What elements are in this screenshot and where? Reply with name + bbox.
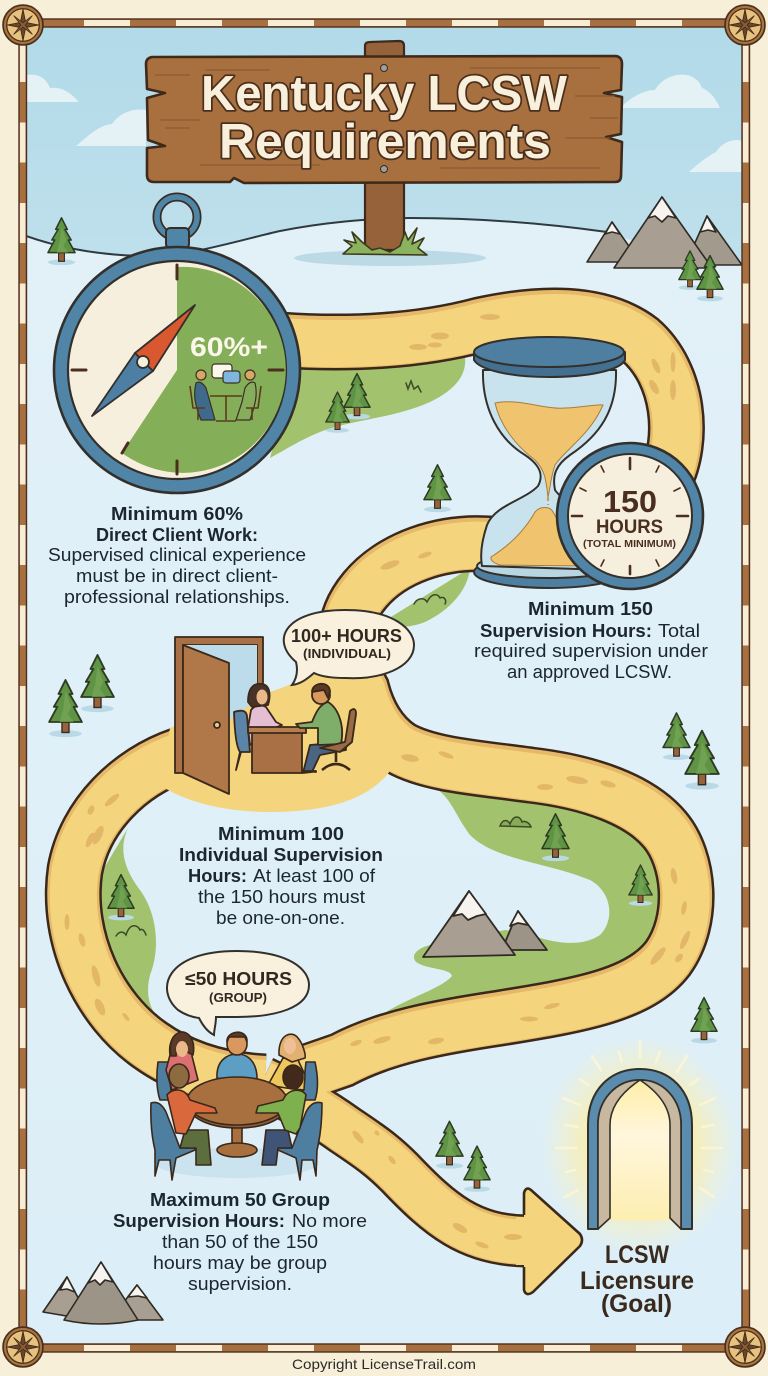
floor shadow <box>155 1148 319 1178</box>
man's torso <box>296 702 342 745</box>
bubble shape <box>284 610 414 685</box>
ticks <box>72 265 283 474</box>
back-right woman body <box>268 1058 305 1090</box>
bottom plate <box>474 556 624 588</box>
road plaza around office <box>160 640 390 812</box>
green 60 percent sector <box>122 267 286 473</box>
text block: 150 hours: Total <box>658 621 700 641</box>
front-left legs <box>180 1130 211 1165</box>
office scene: individual supervision <box>175 637 356 794</box>
door <box>183 645 229 794</box>
text block: 100 individual: be one-on-one. <box>216 908 345 928</box>
clock face <box>568 454 692 578</box>
desk top <box>248 727 306 733</box>
winding road <box>73 316 686 1242</box>
title: Requirements <box>219 115 551 169</box>
text block: 100 individual: Minimum 100 <box>218 824 344 844</box>
meeting icon <box>190 364 261 421</box>
back-right woman's face <box>284 1038 296 1054</box>
HOURS: HOURS <box>596 517 663 538</box>
front-right head <box>283 1065 303 1089</box>
text block: 50 group: No more <box>292 1211 367 1231</box>
text block: 60 percent: Supervised clinical experience <box>48 545 306 565</box>
rays <box>556 1041 722 1197</box>
crown stem <box>166 228 189 248</box>
table pedestal <box>232 1125 242 1147</box>
man's chair <box>320 709 356 752</box>
title <box>201 67 568 169</box>
road patch over arrowhead joint <box>516 1217 530 1265</box>
title: Kentucky LCSW <box>201 67 568 121</box>
text block: 60 percent: Direct Client Work: <box>96 525 258 545</box>
clouds <box>27 75 742 172</box>
dial face <box>68 261 286 479</box>
nails <box>380 64 388 172</box>
compass needle <box>92 305 195 416</box>
falling sand <box>547 497 549 505</box>
top sand <box>495 402 603 497</box>
top plate edge <box>474 352 625 377</box>
center mountains <box>423 891 547 957</box>
table edge <box>188 1104 287 1128</box>
arch outer <box>588 1069 692 1229</box>
grass tuft <box>343 228 427 255</box>
top plate <box>474 337 624 367</box>
text block: 60 percent: professional relationships. <box>64 587 290 607</box>
bubble text 1: ≤50 HOURS <box>185 969 292 989</box>
table top <box>187 1077 287 1125</box>
clock case <box>557 443 703 589</box>
bubble shape <box>167 951 309 1035</box>
text block: 100 individual: Individual Supervision <box>179 845 383 865</box>
bubble text 2: (GROUP) <box>209 990 267 1005</box>
stopwatch: 60% direct client work <box>54 197 300 493</box>
goal label: (Goal) <box>601 1290 672 1318</box>
glow <box>540 1035 740 1255</box>
back-left woman's face <box>176 1041 188 1057</box>
text block: 100 individual: Hours: <box>188 866 247 886</box>
text block: 100 individual: the 150 hours must <box>198 887 365 907</box>
woman <box>248 705 282 745</box>
text block: 50 group: supervision. <box>188 1274 292 1294</box>
crown ring colour <box>157 197 197 237</box>
bottom sand <box>491 508 585 566</box>
text block: 60 percent <box>48 504 306 607</box>
text block: 60 percent: must be in direct client- <box>76 566 278 586</box>
center man head <box>227 1033 247 1055</box>
bubble text 2: (INDIVIDUAL) <box>303 646 391 661</box>
text block: 150 hours <box>474 599 708 682</box>
table base <box>217 1143 257 1157</box>
man's legs <box>303 742 346 773</box>
goal portal <box>540 1035 740 1255</box>
goal label: Licensure <box>580 1267 694 1295</box>
center man body <box>217 1054 257 1082</box>
bubble text 1: 100+ HOURS <box>291 626 402 646</box>
man's shoe <box>303 771 316 772</box>
arrowhead to goal <box>524 1189 582 1294</box>
text block: 150 hours: Minimum 150 <box>528 599 653 619</box>
text block: 50 group: Supervision Hours: <box>113 1211 285 1231</box>
front-left torso <box>167 1090 217 1134</box>
woman's face <box>256 690 268 704</box>
doorway <box>183 645 257 720</box>
grass details <box>116 381 531 936</box>
signpost <box>146 41 622 266</box>
man's hair <box>312 684 330 698</box>
woman's chair <box>234 711 250 770</box>
minor ticks <box>580 466 680 566</box>
arch light <box>609 1080 670 1220</box>
goal label <box>580 1241 694 1318</box>
text block: 60 percent: Minimum 60% <box>111 504 243 524</box>
speech bubble: 50 hours <box>167 951 309 1035</box>
crown ring <box>157 197 197 237</box>
back-right woman's hair <box>279 1034 305 1062</box>
back-left woman <box>166 1032 198 1090</box>
hours clock badge <box>557 443 703 589</box>
text block: 50 group: hours may be group <box>153 1253 327 1273</box>
road markings <box>64 314 692 1250</box>
text block: 150 hours: required supervision under <box>474 641 708 661</box>
woman's head <box>248 684 270 707</box>
150: 150 <box>603 484 657 519</box>
bottom-left mountains <box>43 1262 163 1324</box>
back-left woman's hair <box>170 1032 194 1056</box>
text block: 100 individual <box>179 824 383 928</box>
speech bubble: 100+ hours <box>284 610 414 685</box>
arch inner stone <box>598 1080 681 1229</box>
desk <box>252 731 302 773</box>
front-right chair <box>278 1102 322 1180</box>
text block: 50 group: Maximum 50 Group <box>150 1190 330 1210</box>
wooden plank <box>146 56 622 183</box>
group table scene <box>151 1032 322 1180</box>
front-right torso <box>256 1090 306 1134</box>
wood grain <box>155 68 618 168</box>
copyright: Copyright LicenseTrail.com <box>292 1356 476 1372</box>
center man hair <box>227 1032 247 1042</box>
post <box>365 41 404 250</box>
door knob <box>214 722 220 728</box>
man's head <box>312 686 330 704</box>
glass body <box>481 370 616 570</box>
outer case <box>54 247 300 493</box>
chair base <box>322 752 350 770</box>
hourglass <box>474 337 625 588</box>
text block: 150 hours: an approved LCSW. <box>507 662 672 682</box>
text block: 50 group: than 50 of the 150 <box>162 1232 318 1252</box>
trees <box>48 218 723 1192</box>
front-right legs <box>262 1130 292 1165</box>
front-left head <box>169 1064 189 1088</box>
front-left chair <box>151 1102 195 1180</box>
text block: 150 hours: Supervision Hours: <box>480 621 652 641</box>
text block: 100 individual: At least 100 of <box>253 866 376 886</box>
door frame <box>175 637 263 773</box>
mountains: top right <box>587 197 742 268</box>
60 percent label: 60%+ <box>190 332 268 362</box>
clock ticks <box>572 458 688 574</box>
total minimum: (TOTAL MINIMUM) <box>583 538 676 550</box>
signpost shadow <box>294 250 486 266</box>
text block: 50 group <box>113 1190 367 1294</box>
bottom plate top <box>477 554 621 578</box>
green meadows <box>85 357 690 1020</box>
goal label: LCSW <box>605 1241 669 1269</box>
back chairs <box>157 1062 318 1100</box>
